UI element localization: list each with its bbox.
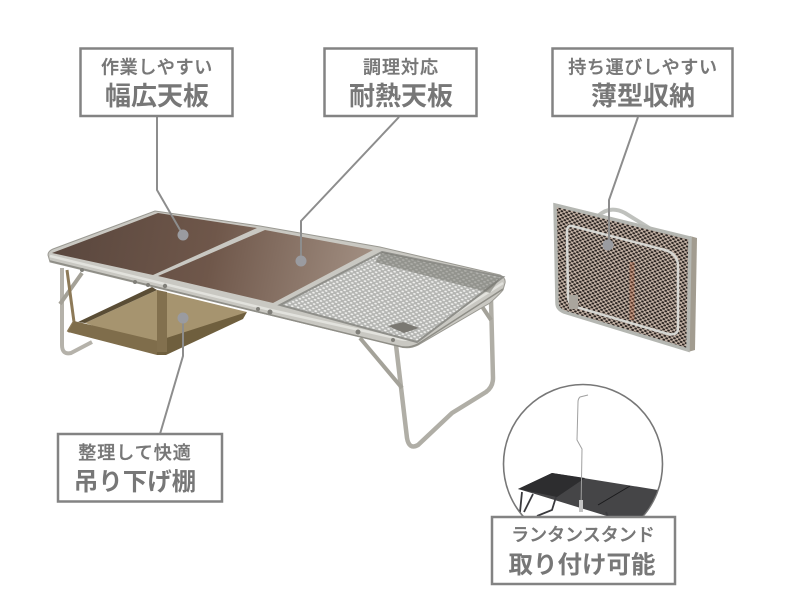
- back legs and hanging shelf: [60, 268, 247, 355]
- mesh top panel: [280, 252, 503, 342]
- folded side hinges: [688, 236, 697, 352]
- callout: 吊り下げ棚: [58, 434, 222, 502]
- lantern stand: [577, 395, 588, 510]
- callout: 耐熱天板: 調理対応: [363, 58, 439, 78]
- callout: 薄型収納: 持ち運びしやすい: [568, 58, 718, 78]
- folded body: [555, 205, 690, 350]
- logo tag: [569, 295, 578, 309]
- callout: 吊り下げ棚: 吊り下げ棚: [74, 468, 196, 496]
- inner rim: [567, 226, 678, 334]
- callout: 幅広天板: 幅広天板: [105, 81, 209, 111]
- folded table photo: [555, 205, 697, 352]
- leader lines and dots: [157, 117, 638, 434]
- table frame: [48, 211, 505, 348]
- callout: 取り付け可能: 取り付け可能: [508, 551, 656, 579]
- lantern stand circle: [502, 384, 664, 516]
- main table photo: [48, 211, 505, 446]
- callout: 取り付け可能: [492, 517, 675, 584]
- front edge highlight: [50, 261, 503, 347]
- callout: 幅広天板: 作業しやすい: [101, 58, 213, 78]
- callout: 取り付け可能: ランタンスタンド: [511, 525, 655, 545]
- handle: [598, 210, 654, 231]
- wood top panels: [52, 213, 373, 303]
- callout: 吊り下げ棚: 整理して快適: [78, 443, 192, 463]
- callout: 薄型収納: [552, 48, 732, 116]
- callout: 薄型収納: 薄型収納: [591, 81, 695, 111]
- frame brackets: [80, 268, 395, 342]
- callout: 耐熱天板: [324, 48, 476, 116]
- right legs: [360, 300, 493, 446]
- black table: [518, 473, 658, 517]
- callout: 幅広天板: [80, 48, 232, 116]
- callout: 耐熱天板: 耐熱天板: [349, 81, 453, 111]
- tag on mesh: [388, 322, 419, 333]
